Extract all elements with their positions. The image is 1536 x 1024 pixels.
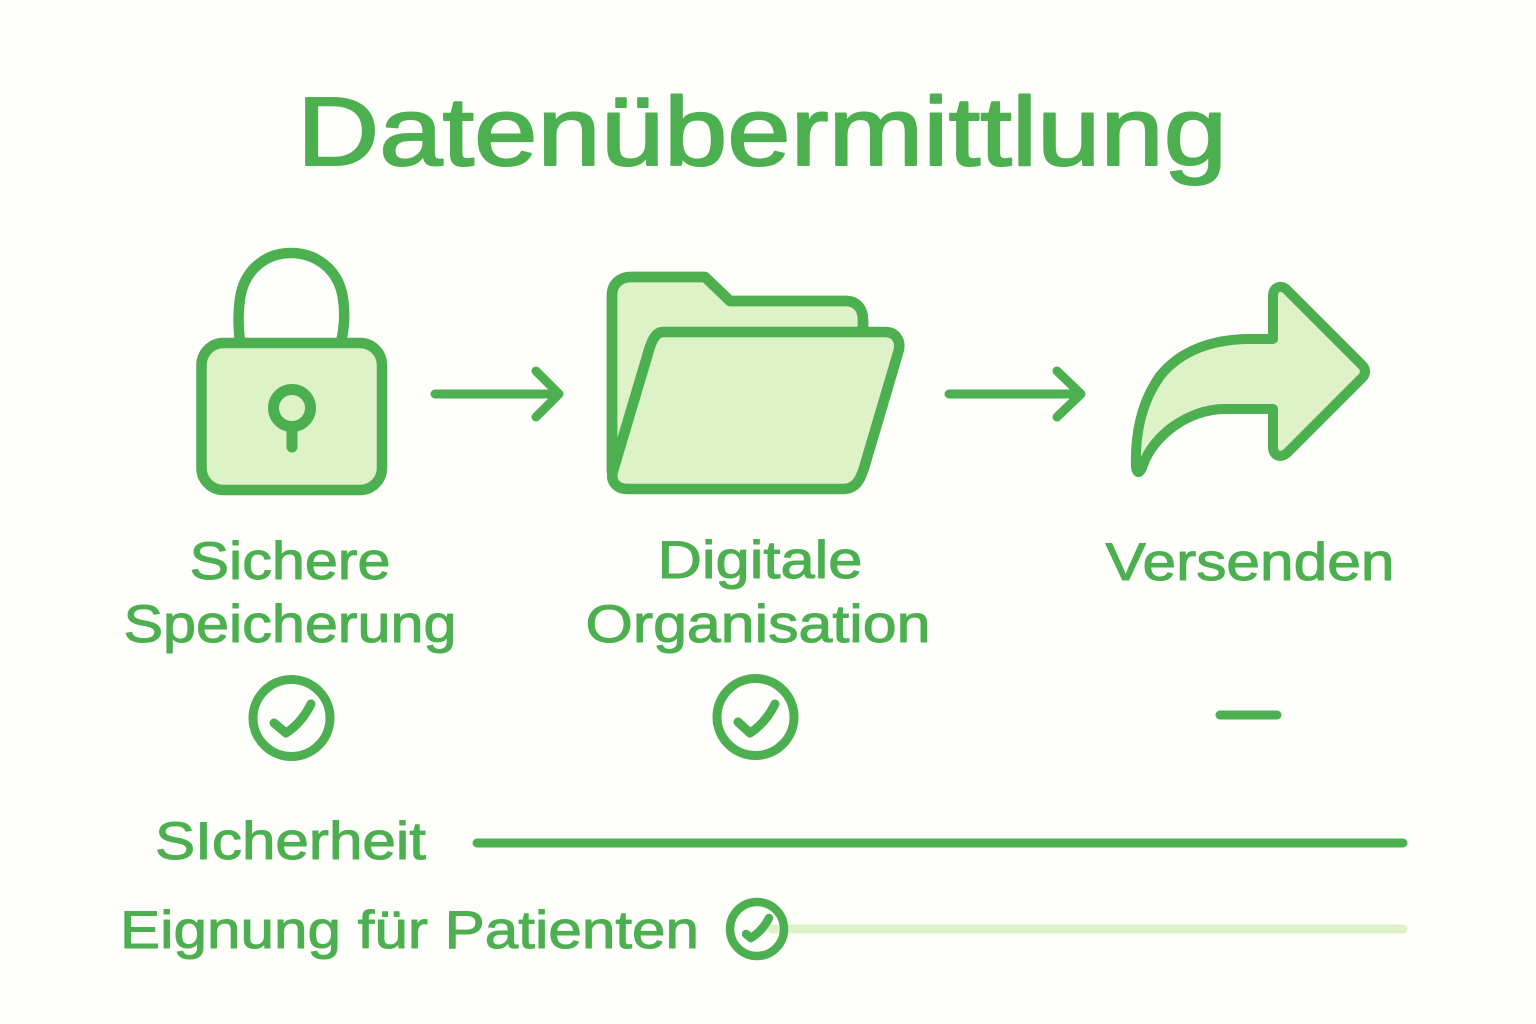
title: Datenübermittlung: [297, 77, 1227, 186]
label: Sicherheit: SIcherheit: [155, 812, 426, 871]
bar: Eignung für Patienten: [772, 924, 1403, 934]
label: Sichere Speicherung: [124, 532, 456, 654]
label: Digitale Organisation: Organisation: [586, 595, 930, 654]
icon: padlock: [202, 253, 382, 490]
icon: check circle storage: [253, 680, 330, 756]
icon: check circle patients: [730, 902, 784, 956]
arrow: lock to folder: [435, 371, 559, 417]
label: Sichere Speicherung: Sichere: [190, 532, 390, 591]
label: Versenden: Versenden: [1106, 533, 1394, 592]
icon: folder: [612, 277, 899, 489]
icon: check circle organisation: [717, 678, 794, 756]
label: Sichere Speicherung: Speicherung: [124, 595, 456, 654]
label: Digitale Organisation: Digitale: [658, 531, 862, 590]
label: Eignung für Patienten: Eignung für Patienten: [120, 901, 699, 960]
icon: share arrow: [1136, 287, 1365, 472]
arrow: folder to share: [949, 371, 1081, 417]
bar: Sicherheit: [477, 838, 1403, 848]
label: Digitale Organisation: [586, 531, 930, 654]
dash: sending: [1220, 710, 1277, 720]
